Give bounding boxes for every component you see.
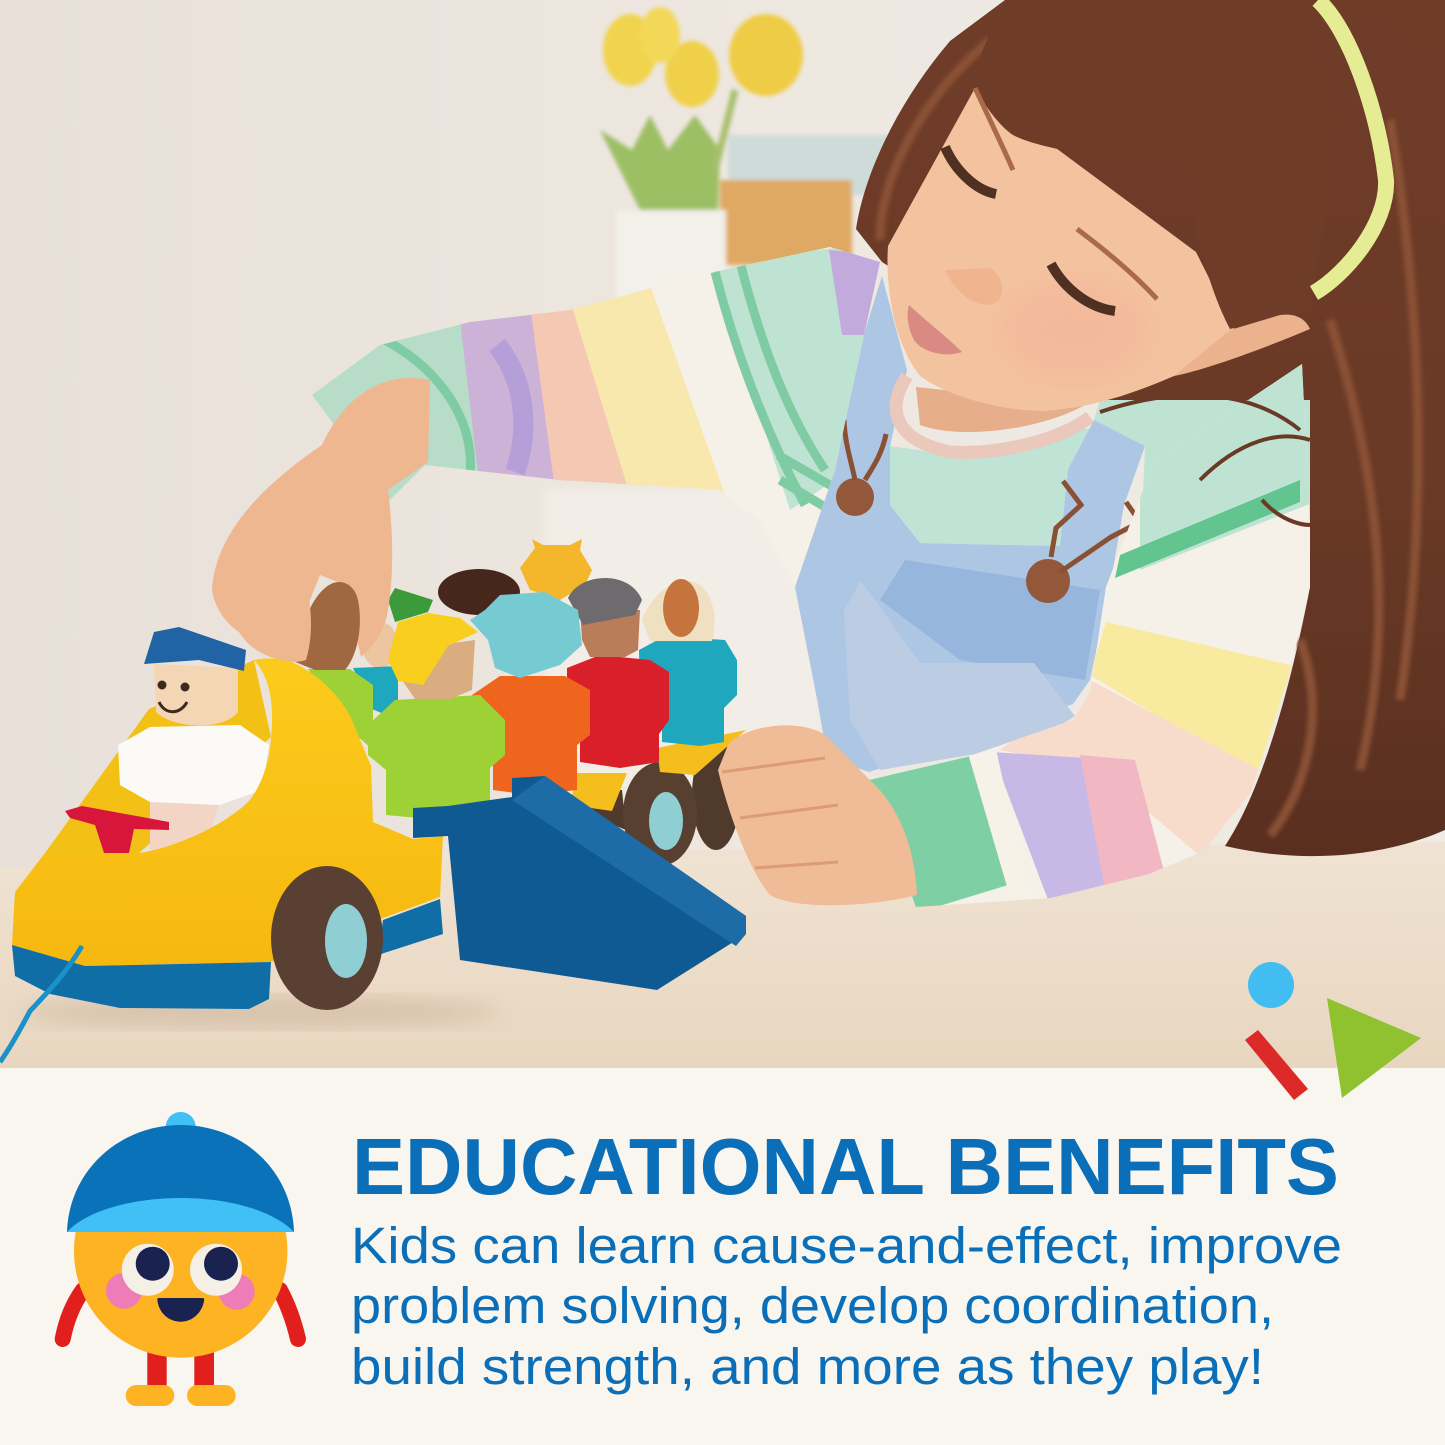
back teal figure xyxy=(353,666,398,720)
trailer bed xyxy=(570,730,746,811)
hat pom xyxy=(166,1112,196,1142)
ear xyxy=(1174,315,1310,376)
car side strip xyxy=(378,899,443,955)
yellow band xyxy=(1092,622,1292,776)
heading: EDUCATIONAL BENEFITS xyxy=(352,1122,1339,1211)
trailer wheels xyxy=(692,746,736,850)
front wheel xyxy=(271,866,383,1010)
car body xyxy=(12,658,443,966)
eyebrows xyxy=(975,88,1157,299)
icon: mascot character xyxy=(63,1112,298,1406)
car shadow xyxy=(20,996,500,1028)
icon: blue circle xyxy=(1248,962,1294,1008)
hat xyxy=(67,1125,294,1232)
arms xyxy=(63,1290,83,1339)
toy ensemble xyxy=(0,539,746,1062)
ramp xyxy=(413,776,746,990)
body text xyxy=(351,1217,1342,1395)
icon: red bar xyxy=(1245,1030,1308,1100)
eyes xyxy=(945,147,996,194)
wall background xyxy=(0,0,1445,880)
pull string xyxy=(0,946,82,1062)
table xyxy=(0,842,1445,1068)
overalls pocket xyxy=(844,581,1075,770)
photo: girl playing with toy car xyxy=(0,0,1445,1068)
dark hair head xyxy=(438,569,520,615)
shoulder band xyxy=(1140,364,1309,570)
giraffe head xyxy=(520,539,592,600)
shoulder behind hair xyxy=(1094,400,1310,523)
sleeve stripes xyxy=(385,262,835,510)
headband xyxy=(1314,0,1386,293)
feet xyxy=(126,1385,174,1406)
ramp slide xyxy=(512,776,746,946)
hair highlights xyxy=(880,40,1418,835)
small head xyxy=(362,622,398,668)
nose xyxy=(945,268,1002,305)
overall hooks xyxy=(844,420,1140,572)
bear head xyxy=(293,582,360,670)
mouth xyxy=(157,1298,204,1322)
tee shirt xyxy=(890,428,1090,546)
body xyxy=(74,1144,287,1358)
right sleeve xyxy=(860,350,1320,920)
bottom panel xyxy=(0,1068,1445,1445)
left hand xyxy=(212,378,430,662)
hair back xyxy=(856,0,1445,856)
lilac band xyxy=(992,752,1155,905)
mouth xyxy=(908,305,962,354)
steering wheel xyxy=(65,806,169,853)
blurred white cabinet xyxy=(550,495,592,772)
collar xyxy=(896,376,1090,452)
driver figure xyxy=(118,627,269,850)
hair wisps over shoulder xyxy=(1100,395,1310,525)
buckles xyxy=(836,478,874,516)
elephant xyxy=(470,592,582,678)
car windshield xyxy=(45,660,271,853)
car bumper xyxy=(12,945,271,1009)
cuff xyxy=(870,756,1007,907)
cheek xyxy=(1016,294,1134,366)
overalls xyxy=(795,276,1145,772)
overalls bib shading xyxy=(880,560,1100,680)
neck xyxy=(916,387,1085,432)
face xyxy=(887,88,1240,411)
body text: Kids can learn cause-and-effect, improve xyxy=(351,1217,1342,1274)
back lime figure xyxy=(308,669,373,750)
green figure xyxy=(368,613,505,820)
upper arm sleeve xyxy=(312,247,880,587)
body text: problem solving, develop coordination, xyxy=(351,1277,1274,1334)
peach band xyxy=(1000,681,1258,854)
right hand xyxy=(718,725,917,905)
legs xyxy=(147,1350,167,1388)
red figure xyxy=(567,578,669,768)
blurred flower vase and frame xyxy=(600,7,893,310)
orange figure xyxy=(472,676,590,795)
teal figure with dog xyxy=(639,579,737,746)
bangs xyxy=(979,38,1234,329)
index finger xyxy=(263,560,311,662)
hat brim xyxy=(67,1198,294,1232)
cheeks xyxy=(106,1273,142,1309)
green hat head xyxy=(388,588,433,622)
icon: green triangle xyxy=(1327,998,1421,1098)
eyes xyxy=(122,1244,174,1296)
body text: build strength, and more as they play! xyxy=(351,1338,1264,1395)
